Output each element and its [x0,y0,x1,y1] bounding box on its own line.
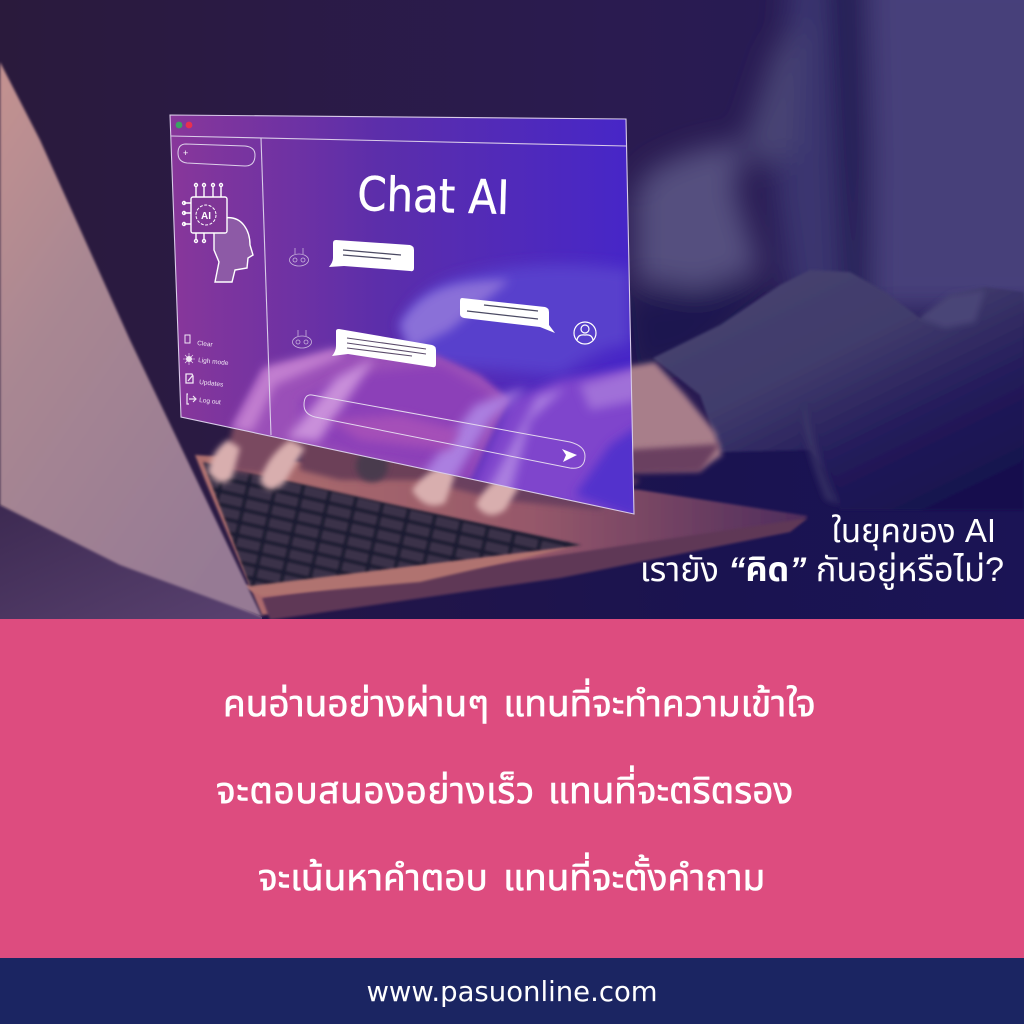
holographic chat panel [170,115,640,520]
sidebar menu: Ligh mode [198,357,229,367]
icon: AI chip and head: AI [201,211,211,222]
user avatar [574,322,596,344]
panel outline and dividers [170,115,634,514]
background: blurred person torso [620,0,1024,380]
ghosted hands inside panel [230,265,640,520]
caption on photo: เรายัง “คิด” กันอยู่หรือไม่? [640,551,1004,589]
keyboard [203,462,582,586]
sidebar menu: Log out [199,397,221,406]
hero photo: hands typing on laptop with Chat AI hologram [0,0,1024,619]
sidebar menu: Clear [197,340,214,349]
statement 3: จะเน้นหาคำตอบ แทนที่จะตั้งคำถาม [258,857,765,898]
chat bubble 2 [460,298,555,333]
website url: www.pasuonline.com [366,976,658,1008]
panel: pink statements [0,619,1024,958]
caption on photo: ในยุคของ AI [832,512,996,549]
chat bubble 1 [329,240,414,271]
hands [208,362,722,515]
icon: AI chip and head [182,184,253,282]
input box [304,395,585,468]
robot avatar 1 [290,248,308,266]
chat bubble 3 [332,329,436,367]
footer bar [0,958,1024,1024]
sidebar menu [183,335,229,406]
statement 1: คนอ่านอย่างผ่านๆ แทนที่จะทำความเข้าใจ [223,683,816,724]
dark navy floor [336,450,1024,619]
laptop lid [0,62,262,620]
new chat button: + [183,148,188,158]
right sleeve [653,270,1024,510]
panel title: Chat AI [357,167,510,226]
sidebar menu: Updates [199,379,224,389]
new chat button [178,144,255,166]
robot avatar 2 [292,330,312,348]
caption on photo [640,512,1004,590]
statement 2: จะตอบสนองอย่างเร็ว แทนที่จะตริตรอง [216,770,793,811]
window buttons [176,122,192,128]
laptop base [195,455,808,620]
